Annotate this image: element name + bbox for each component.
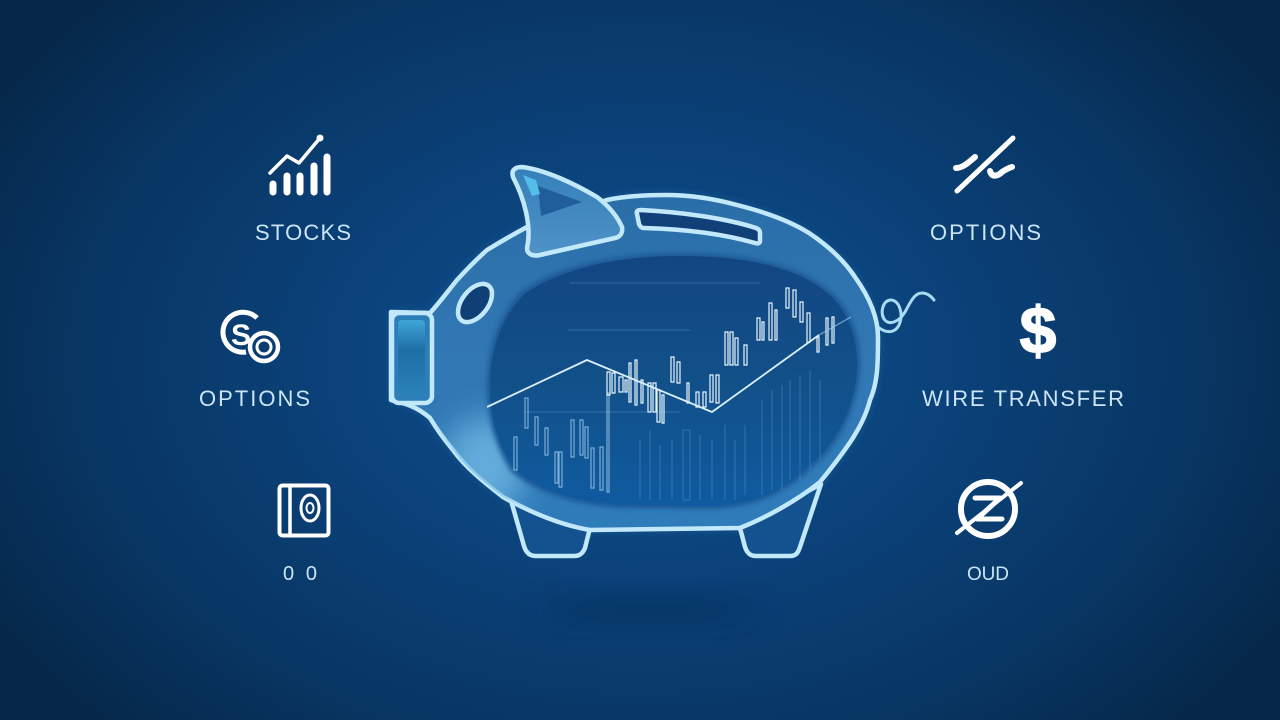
trend line <box>487 317 851 412</box>
lower candlesticks <box>514 393 609 492</box>
body <box>391 195 878 530</box>
label: options: OPTIONS <box>199 386 310 411</box>
snout <box>392 313 432 403</box>
faint background chart <box>525 283 820 500</box>
label: options: OPTIONS <box>930 220 1041 245</box>
eye <box>451 278 499 328</box>
glass window <box>487 253 860 509</box>
tail <box>878 293 934 332</box>
icon: crossed circle <box>957 482 1021 536</box>
left leg <box>510 497 590 556</box>
piggy bank <box>391 167 934 556</box>
item: wire transfer (right middle) <box>922 293 1124 411</box>
label: wire transfer: WIRE TRANSFER <box>922 386 1124 411</box>
glow behind pig <box>391 195 878 530</box>
label: oud: OUD <box>967 564 1009 585</box>
item: options (left middle) <box>199 312 310 411</box>
icon: slashed squiggles <box>956 138 1013 191</box>
icon: safe <box>280 486 328 536</box>
label: stocks: STOCKS <box>255 220 351 245</box>
upper candlesticks <box>607 288 834 423</box>
ear <box>512 167 622 256</box>
item: oud (right bottom) <box>957 482 1021 585</box>
right leg <box>740 484 821 556</box>
item: options (right top) <box>930 138 1041 245</box>
item: stocks (left top) <box>255 134 351 245</box>
icon: coins: S <box>231 319 251 352</box>
icon: dollar sign: $ <box>1020 293 1056 367</box>
item: 00 (left bottom) <box>280 486 328 585</box>
coin slot <box>637 210 760 243</box>
glass highlight <box>443 417 527 513</box>
label: 00: 00 <box>283 563 317 585</box>
icon: bar chart with rising line <box>270 134 327 192</box>
